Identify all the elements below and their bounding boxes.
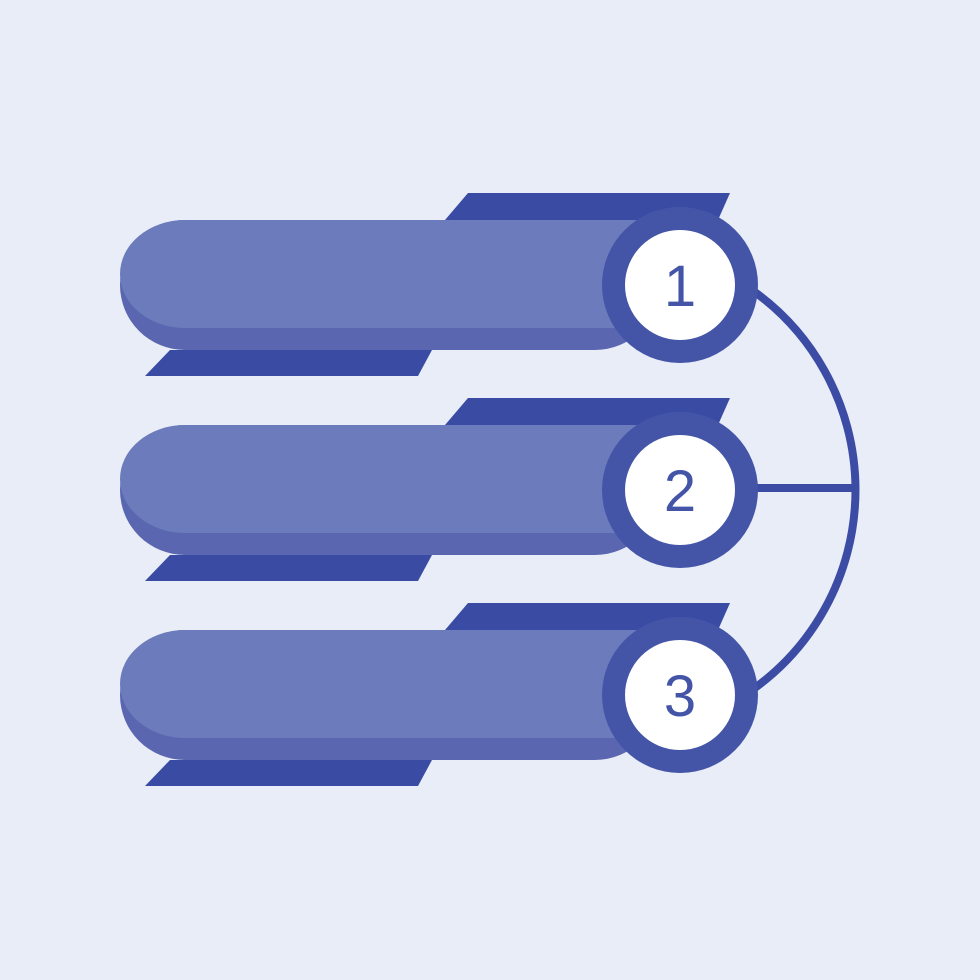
bar 3 bbox=[120, 630, 660, 760]
ribbon top 3 bbox=[445, 603, 730, 630]
item 1 bbox=[120, 193, 758, 376]
ribbon top 1 bbox=[445, 193, 730, 220]
badge 2: 2 bbox=[664, 459, 696, 524]
bar 2 bbox=[120, 425, 660, 555]
item 2 bbox=[120, 398, 758, 581]
ribbon bottom 3 bbox=[145, 760, 432, 786]
badge 3 bbox=[602, 617, 758, 773]
bar 1 bbox=[120, 220, 660, 350]
connector arc bbox=[752, 290, 858, 690]
ribbon top 2 bbox=[445, 398, 730, 425]
badge 1 bbox=[602, 207, 758, 363]
badge 2 bbox=[602, 412, 758, 568]
ribbon bottom 2 bbox=[145, 555, 432, 581]
ribbon bottom 1 bbox=[145, 350, 432, 376]
item 3 bbox=[120, 603, 758, 786]
badge 1: 1 bbox=[664, 254, 696, 319]
badge 3: 3 bbox=[664, 664, 696, 729]
